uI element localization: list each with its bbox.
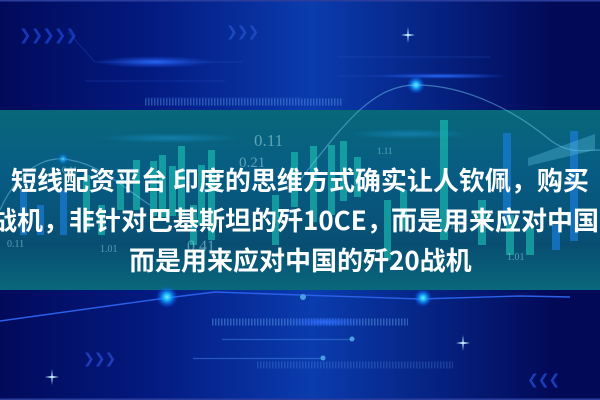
headline line 2: 战机，非针对巴基斯坦的歼10CE， (0, 201, 393, 238)
headline line 2: 而是用来应对中国 (391, 201, 599, 238)
chart numbers: 0.11 (7, 239, 24, 250)
teal central band (0, 85, 600, 290)
bar chart: teal bars (83, 120, 534, 260)
light streak (370, 73, 510, 79)
icon: sparkles (45, 335, 470, 385)
chart numbers: 1.01 (100, 244, 118, 255)
headline (0, 161, 599, 278)
headline line 1: 短线配资平台 印度的思维方式确实让人钦佩，购买 (11, 161, 589, 198)
icon: chevrons bottom right: ❮❮❮ (527, 372, 559, 388)
binary strip lower (257, 362, 453, 368)
chart numbers: 0.11 (62, 165, 77, 175)
icon: middle chevrons: ❯❯❯ (226, 24, 258, 40)
chart numbers: 0.41 (187, 238, 215, 255)
bottom navy band (0, 286, 600, 400)
chart numbers: 1.01 (507, 252, 524, 263)
data lines (193, 340, 352, 358)
light flare (95, 56, 215, 68)
light band (528, 134, 595, 166)
headline line 3: 而是用来应对中国的歼20战机 (129, 241, 472, 278)
horizon line (0, 292, 570, 321)
chart numbers: 1.11 (377, 146, 392, 156)
curve glow point (407, 76, 425, 94)
glow points (156, 286, 178, 308)
binary strip (145, 98, 342, 106)
icon: left chevrons: ❯❯❯❯❯ (19, 26, 77, 44)
chart numbers (7, 131, 524, 263)
top navy band (0, 0, 600, 110)
icon: chevrons bottom left: ❯❯❯ (83, 351, 115, 367)
glow point (57, 153, 69, 165)
binary strip upper (212, 318, 408, 326)
bar chart: blue bars (20, 131, 578, 250)
icon: sparkle (401, 27, 415, 43)
chart numbers: 0.21 (239, 155, 265, 171)
chart numbers: 0.11 (254, 131, 283, 150)
chart numbers: 1.01 (450, 222, 464, 231)
trend curve (0, 85, 600, 210)
